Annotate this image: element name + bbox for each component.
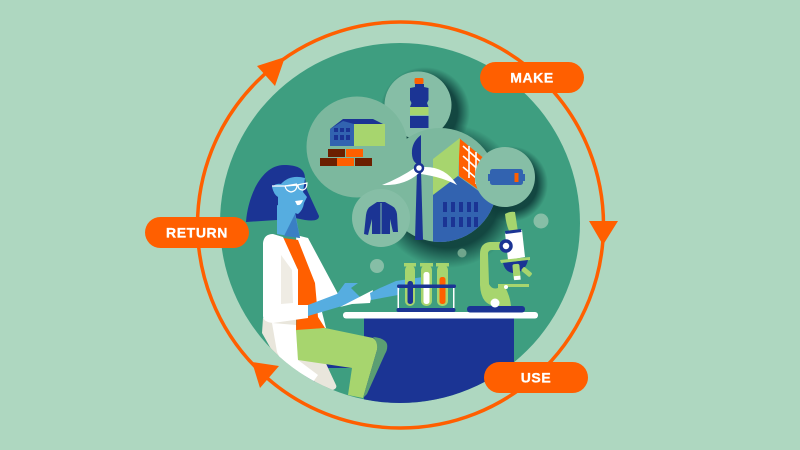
tube orange bbox=[437, 265, 448, 306]
coat sleeve bbox=[263, 234, 308, 323]
arrow: make to use bbox=[589, 221, 618, 245]
smile bbox=[295, 200, 303, 205]
glasses bbox=[272, 183, 307, 192]
arm and hand bbox=[308, 277, 423, 316]
icon: building bbox=[330, 119, 385, 146]
label: MAKE: MAKE bbox=[510, 70, 554, 86]
label: USE bbox=[484, 362, 588, 393]
scientist bbox=[246, 165, 423, 400]
legs bbox=[296, 328, 378, 398]
test tube rack bbox=[396, 263, 456, 312]
bubble: bottle bbox=[384, 72, 452, 138]
icon: green building wall bbox=[433, 138, 460, 195]
coat right panel bbox=[296, 235, 338, 330]
scientist and lab scene bbox=[246, 67, 548, 416]
coat lower back bbox=[262, 318, 336, 390]
arrow: use to return bbox=[252, 362, 279, 388]
icon: solar panel bbox=[459, 138, 482, 190]
tube green bbox=[405, 265, 415, 306]
decorative bubbles bbox=[370, 214, 548, 273]
label: USE: USE bbox=[521, 370, 551, 386]
neck bbox=[277, 205, 300, 238]
bubble: energy and buildings bbox=[382, 128, 498, 242]
bubble: building materials bbox=[306, 96, 408, 198]
label: RETURN: RETURN bbox=[166, 224, 228, 240]
icon: bricks bbox=[320, 149, 372, 166]
cycle ring bbox=[198, 22, 618, 428]
icon: wind turbine bbox=[382, 135, 457, 240]
label: MAKE bbox=[480, 62, 584, 93]
icon: battery bbox=[488, 169, 525, 185]
tube white bbox=[421, 265, 432, 306]
face bbox=[272, 177, 307, 214]
table bbox=[343, 312, 538, 403]
label: RETURN bbox=[145, 217, 249, 248]
main green circle bbox=[220, 43, 580, 403]
microscope bbox=[467, 212, 533, 312]
shadows behind bubbles bbox=[376, 67, 548, 268]
bubble: jacket bbox=[352, 189, 410, 247]
shirt bbox=[283, 238, 325, 331]
bubble: battery bbox=[475, 147, 535, 207]
arrow: return to make bbox=[257, 57, 285, 86]
icon: blue factory bbox=[433, 176, 498, 242]
chair bbox=[306, 364, 352, 382]
icon: bottle bbox=[410, 78, 428, 128]
icon: jacket bbox=[364, 202, 398, 235]
hair bbox=[246, 165, 319, 222]
